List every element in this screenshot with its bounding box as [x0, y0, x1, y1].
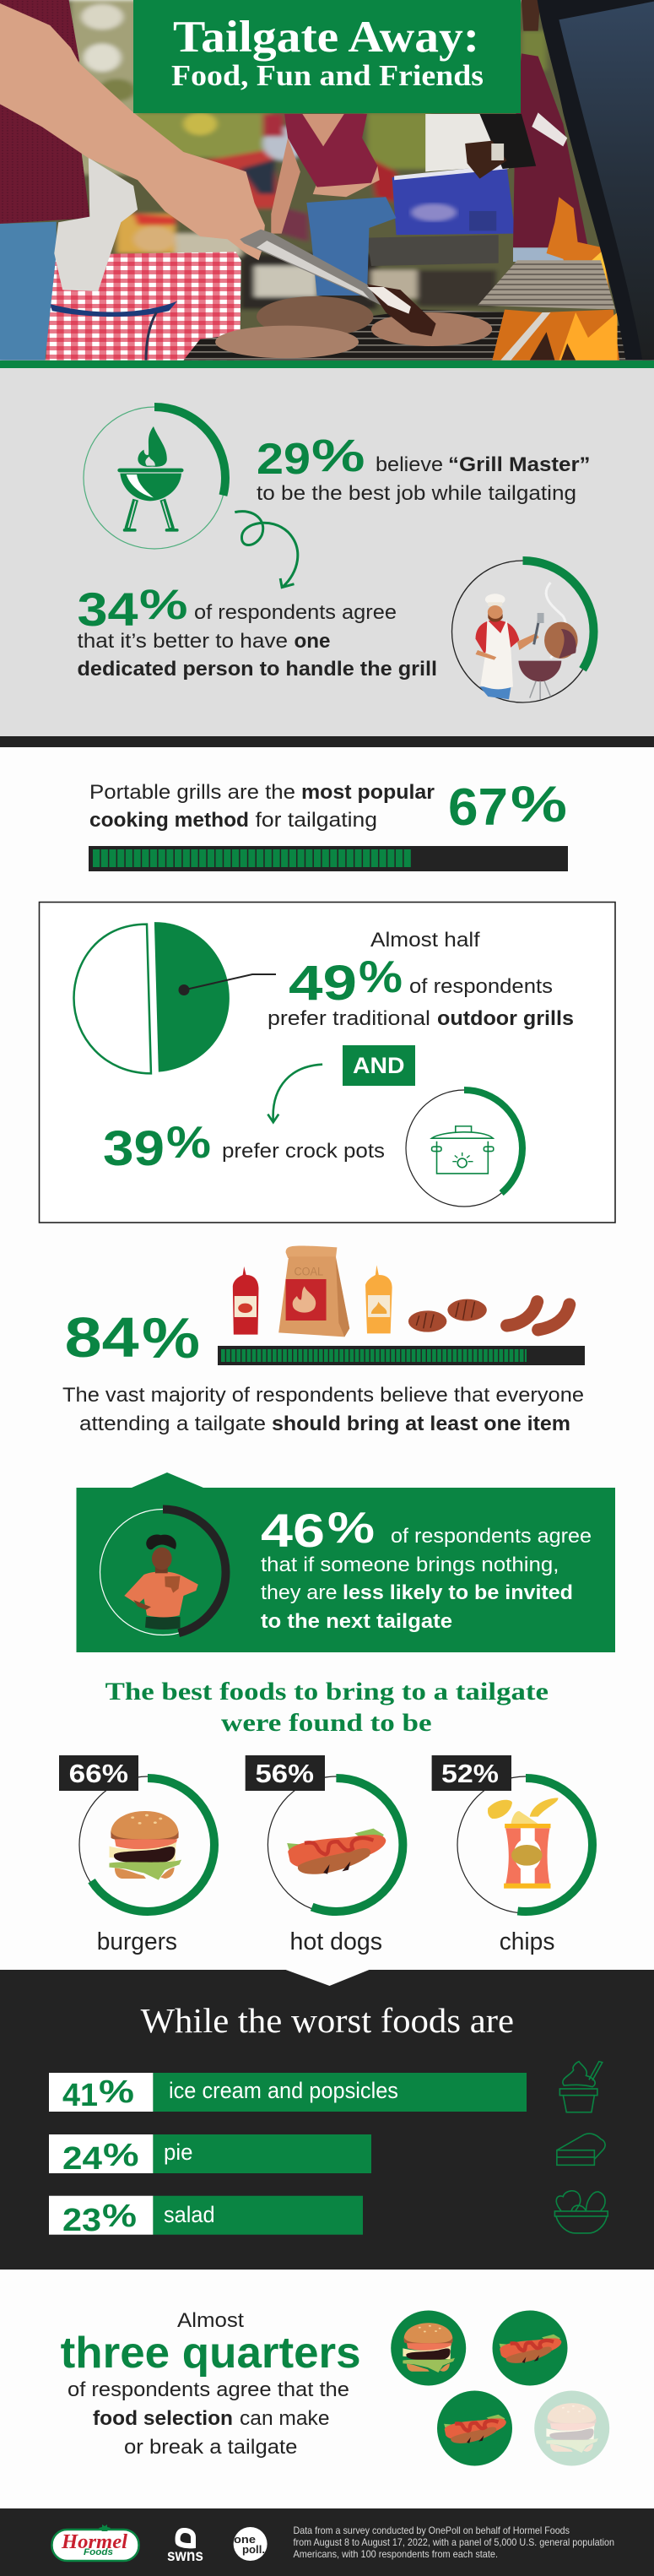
67% figure: 67	[448, 778, 508, 837]
icon: sausages	[507, 1302, 570, 1330]
icon: person with thumbs down	[124, 1535, 198, 1630]
green divider under hero	[0, 361, 654, 368]
34% stat: one	[294, 630, 331, 653]
arrow: curved arrow to crock pots	[268, 1065, 322, 1122]
icon: pie slice	[557, 2134, 605, 2165]
bar: salad 23%: 23	[62, 2203, 101, 2238]
three quarters text: can make	[240, 2407, 329, 2430]
panel: less likely to be invited	[76, 1472, 615, 1652]
39% stat: %	[166, 1118, 211, 1168]
hot dogs label: hot dogs	[290, 1928, 382, 1955]
bar: salad 23%	[49, 2196, 363, 2238]
panel: grill master	[0, 368, 654, 747]
bar: ice cream and popsicles 41%: 41	[62, 2078, 98, 2113]
source note: Data from a survey conducted by OnePoll on behalf of Hormel Foods	[294, 2524, 570, 2536]
heading: best foods: were found to be	[221, 1709, 432, 1737]
34% stat: of respondents agree	[194, 601, 397, 624]
icon: chips bag	[488, 1798, 558, 1889]
bar: ice cream and popsicles 41%	[49, 2073, 527, 2113]
34% stat: dedicated person to handle the grill	[78, 658, 437, 681]
bar: salad 23%: %	[102, 2199, 137, 2234]
sausages	[371, 312, 492, 346]
logo: one poll	[234, 2527, 268, 2561]
logo: one poll: one	[234, 2533, 256, 2546]
footer	[0, 2508, 654, 2576]
title line 1: Tailgate Away:	[173, 13, 479, 62]
AND tag: AND	[353, 1053, 405, 1078]
29% stat: believe	[376, 453, 443, 476]
pie callout line	[179, 974, 276, 995]
29% stat: 29	[257, 435, 311, 484]
title banner	[133, 0, 521, 113]
white truck background and cooler	[425, 114, 505, 171]
52% label	[432, 1755, 511, 1791]
bar: pie 24%: %	[103, 2138, 139, 2173]
66% label: 66%	[69, 1759, 128, 1788]
67% figure: %	[511, 776, 567, 832]
icon: ketchup bottle	[233, 1266, 258, 1335]
tyre	[367, 235, 499, 266]
food card: burgers	[59, 1755, 216, 1955]
34% stat: 34	[78, 583, 138, 636]
title line 2: Food, Fun and Friends	[171, 59, 484, 92]
bar: salad 23%: salad	[164, 2202, 215, 2227]
icon: chef at grill	[476, 583, 578, 699]
ring 46%	[100, 1510, 226, 1635]
ring 66%	[79, 1776, 216, 1913]
plastic bag	[54, 158, 138, 291]
source note	[294, 2524, 614, 2560]
34% stat: %	[139, 581, 187, 628]
46% stat: to the next tailgate	[261, 1610, 452, 1633]
46% stat: 46	[261, 1504, 325, 1557]
grill progress ring 29%	[84, 407, 225, 549]
portable grills text: cooking method	[89, 809, 249, 832]
portable grills text: for tailgating	[255, 809, 377, 832]
source note: Americans, with 100 respondents from each state.	[294, 2548, 498, 2560]
49% stat	[268, 929, 574, 1030]
84% figure: %	[142, 1306, 200, 1370]
ring 52%	[457, 1776, 594, 1913]
46% stat: %	[327, 1504, 375, 1553]
56% label	[246, 1755, 325, 1791]
icon: crock pot	[432, 1126, 494, 1174]
34% stat	[78, 581, 437, 681]
icon: hot dog token	[493, 2310, 567, 2386]
bar: ice cream and popsicles 41%: %	[99, 2074, 134, 2110]
portable grills text: most popular	[301, 781, 435, 804]
panel: everyone brings an item	[62, 1246, 585, 1435]
84% figure	[65, 1306, 200, 1370]
icon: mustard bottle	[365, 1265, 392, 1333]
food card: hot dogs	[246, 1755, 404, 1955]
panel: outdoor grills and crock pots	[39, 902, 615, 1223]
grill lid	[538, 0, 654, 361]
griller arm and hand	[0, 3, 265, 260]
three quarters text: or break a tailgate	[124, 2436, 297, 2459]
icon: hot dog	[287, 1829, 386, 1874]
food card: chips	[432, 1755, 594, 1955]
three quarters text: Almost	[177, 2309, 244, 2332]
bar: ice cream and popsicles 41%: ice cream and popsicles	[169, 2078, 398, 2103]
bar: pie 24%: pie	[164, 2139, 192, 2165]
49% stat: %	[359, 952, 403, 1002]
52% label: 52%	[441, 1759, 499, 1788]
29% stat: to be the best job while tailgating	[257, 482, 576, 505]
icon: salad bowl	[554, 2191, 608, 2233]
progress bar 67%	[89, 846, 568, 871]
portable grills text	[89, 781, 435, 832]
crock pot ring 39%	[406, 1090, 522, 1207]
84% figure: 84	[65, 1306, 139, 1369]
three quarters text	[61, 2309, 361, 2459]
source note: from August 8 to August 17, 2022, with a panel of 5,000 U.S. general population	[294, 2536, 614, 2548]
66% label	[59, 1755, 138, 1791]
icon: burger	[109, 1811, 181, 1880]
39% stat	[103, 1118, 385, 1176]
icon: coal bag: COAL	[294, 1265, 323, 1278]
46% stat: less likely to be invited	[343, 1581, 573, 1604]
panel: three quarters	[61, 2309, 609, 2465]
icon: grill with flame	[117, 426, 183, 532]
49% stat: prefer traditional	[268, 1007, 430, 1030]
three quarters text: food selection	[93, 2407, 233, 2430]
logo: one poll: poll.	[242, 2543, 265, 2556]
logo: Hormel Foods: Hormel	[61, 2531, 127, 2553]
49% stat: of respondents	[409, 975, 553, 998]
chef progress ring 34%	[452, 561, 594, 702]
49% stat: 49	[289, 956, 357, 1011]
maroon shirt of griller	[0, 0, 89, 224]
heading: best foods: The best foods to bring to a tailgate	[105, 1678, 549, 1706]
tongs	[240, 230, 411, 315]
bar: pie 24%	[49, 2134, 371, 2177]
ring 56%	[268, 1776, 404, 1913]
icon: patties	[408, 1299, 487, 1332]
67% figure	[448, 776, 567, 837]
grill grate	[183, 310, 625, 361]
icon: hot dog token 2	[437, 2391, 512, 2465]
29% stat	[257, 431, 591, 505]
logo: swns: swns	[167, 2547, 203, 2565]
29% stat: “Grill Master”	[448, 453, 591, 476]
three quarters text: of respondents agree that the	[68, 2378, 349, 2401]
chips label: chips	[500, 1928, 554, 1955]
icon: burger token	[391, 2310, 466, 2386]
heading: best foods	[105, 1678, 549, 1737]
person in maroon jersey	[513, 53, 588, 247]
39% stat: 39	[103, 1121, 165, 1176]
46% stat: of respondents agree	[391, 1525, 592, 1548]
logo: swns	[167, 2528, 203, 2565]
hero photo: man grilling at a tailgate	[0, 0, 654, 361]
three quarters text: three quarters	[61, 2329, 361, 2378]
29% stat: %	[311, 431, 365, 481]
icons: ketchup, coal, mustard, patties, sausages	[233, 1246, 570, 1337]
jeans	[0, 222, 57, 361]
84% description	[62, 1384, 584, 1435]
seated woman	[271, 138, 300, 234]
56% label: 56%	[255, 1759, 314, 1788]
84% description: should bring at least one item	[272, 1413, 570, 1435]
49% stat: Almost half	[370, 929, 480, 952]
AND tag	[343, 1045, 415, 1086]
raised grill tray	[478, 260, 615, 310]
84% description: The vast majority of respondents believe that everyone	[62, 1384, 584, 1407]
46% stat: they are	[261, 1581, 338, 1604]
fire behind tray	[547, 197, 610, 293]
heading: worst foods: While the worst foods are	[141, 2001, 514, 2040]
panel: portable grills	[89, 776, 568, 871]
icon: faded burger token	[534, 2391, 609, 2465]
bar: pie 24%: 24	[62, 2141, 102, 2177]
logo: Hormel Foods: Foods	[84, 2547, 113, 2557]
46% stat	[261, 1504, 592, 1633]
portable grills text: Portable grills are the	[89, 781, 295, 804]
logo: Hormel Foods	[52, 2524, 138, 2561]
39% stat: prefer crock pots	[222, 1140, 385, 1163]
84% description: attending a tailgate	[79, 1413, 266, 1435]
icon: coal bag	[278, 1246, 349, 1337]
burgers label: burgers	[97, 1928, 177, 1955]
49% stat: outdoor grills	[437, 1007, 574, 1030]
arrow: curly arrow	[235, 512, 298, 588]
34% stat: that it’s better to have	[78, 630, 288, 653]
progress bar 84%	[218, 1346, 585, 1365]
icon: ice cream cup	[559, 2062, 603, 2112]
panel: worst foods	[0, 1970, 654, 2270]
pie chart 49%	[73, 922, 230, 1073]
46% stat: that if someone brings nothing,	[261, 1554, 559, 1576]
tablecloth	[46, 252, 241, 361]
